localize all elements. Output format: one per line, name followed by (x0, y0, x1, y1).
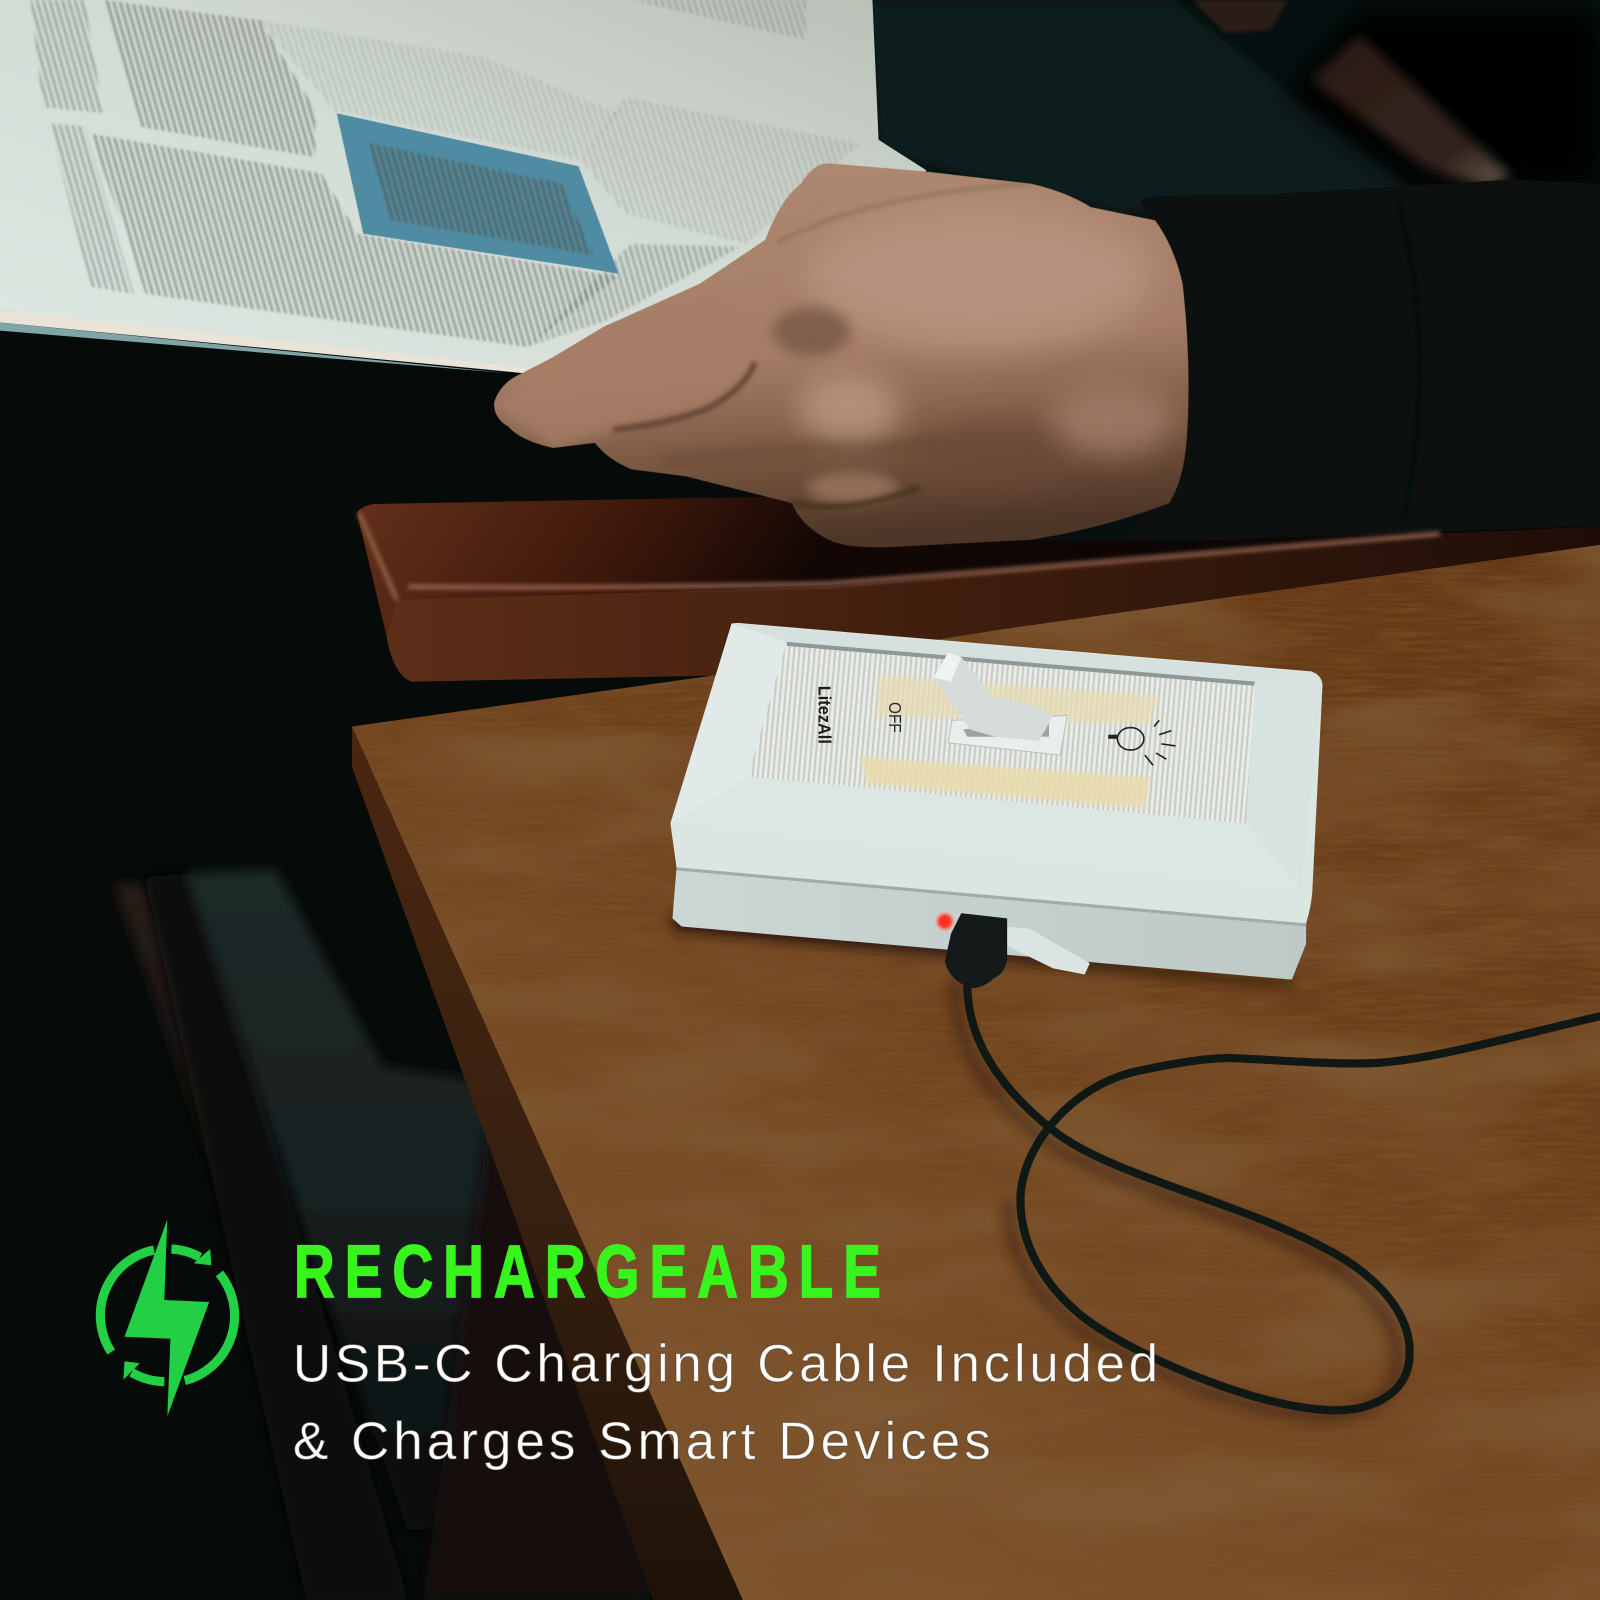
subheading line 1: USB-C Charging Cable Included (293, 1335, 1158, 1394)
lens window (748, 642, 1255, 823)
USB-C plug (945, 913, 1007, 988)
hand (480, 153, 1204, 561)
thumb (506, 379, 730, 448)
wooden armrest (357, 496, 1600, 682)
label: brand: LitezAll (814, 686, 834, 744)
charging cable (955, 977, 1600, 1416)
magazine (0, 0, 927, 373)
icon: light bulb (1108, 720, 1176, 765)
red charging LED (934, 910, 956, 933)
device front body (672, 867, 1306, 980)
left bevel (670, 623, 787, 823)
heading: RECHARGEABLE (294, 1231, 881, 1314)
blue sidebar box (337, 113, 618, 273)
device lid outline (670, 623, 1322, 923)
lower bevel (670, 777, 1301, 890)
upper-right clothing and chair back (867, 0, 1600, 551)
table top (352, 545, 1600, 1600)
icon: recharge bolt (100, 1219, 235, 1416)
label: off: OFF (885, 702, 905, 733)
chair legs (114, 869, 653, 1600)
sleeve (1122, 180, 1600, 546)
right bevel (1246, 673, 1322, 890)
device: switch light (670, 623, 1322, 988)
subheading line 2: & Charges Smart Devices (293, 1412, 991, 1471)
top bevel (732, 623, 1316, 682)
toggle switch (934, 653, 1067, 755)
port cover (1005, 927, 1090, 974)
lid seam (677, 867, 1306, 927)
